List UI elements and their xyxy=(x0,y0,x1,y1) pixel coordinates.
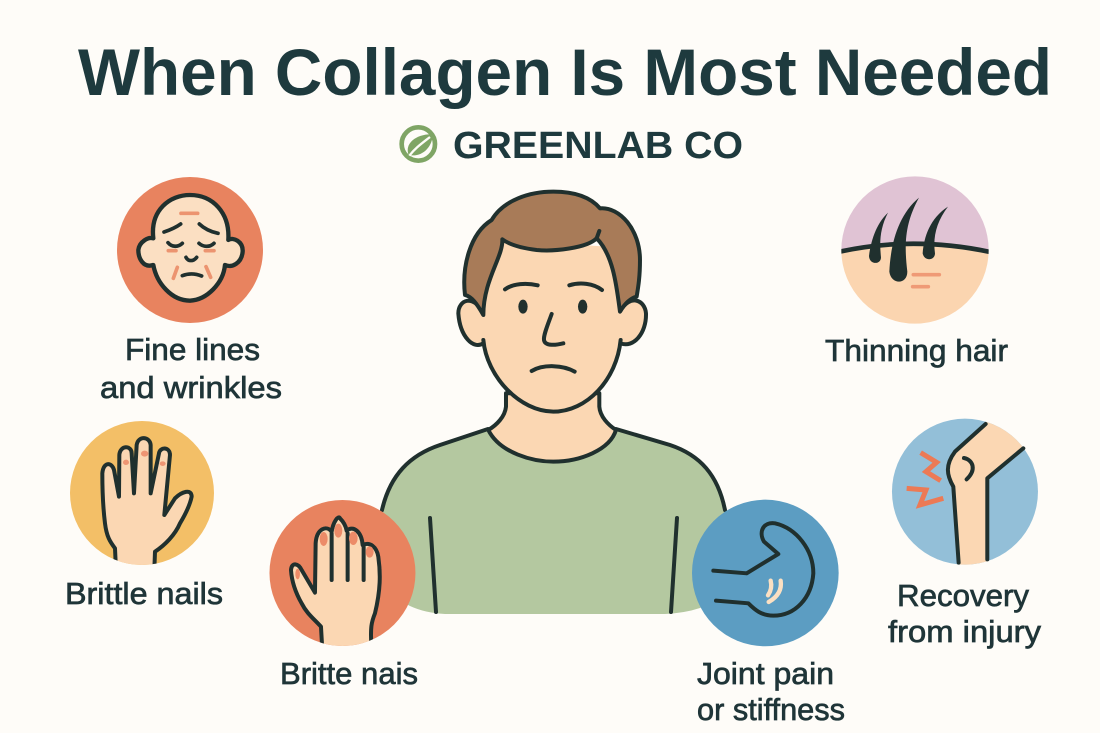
neck xyxy=(488,393,616,462)
icon: hand on red circle xyxy=(269,500,415,650)
label: fine lines: and wrinkles xyxy=(100,370,282,405)
label: recovery: from injury xyxy=(888,614,1042,649)
icon: joint on blue circle xyxy=(692,500,839,646)
label: recovery: Recovery xyxy=(897,578,1029,613)
eyes xyxy=(518,300,528,314)
label: recovery xyxy=(888,578,1042,649)
label: joint pain xyxy=(697,656,845,727)
icon: knee on blue circle xyxy=(892,417,1038,570)
pain zigzags xyxy=(907,453,943,505)
label: fine lines: Fine lines xyxy=(125,332,260,367)
nose xyxy=(544,314,563,345)
label: joint pain: Joint pain xyxy=(697,656,834,691)
title: When Collagen Is Most Needed xyxy=(78,35,1052,109)
head and neck xyxy=(458,192,646,462)
brand name: GREENLAB CO xyxy=(453,125,743,167)
icon: leaf ring xyxy=(402,127,435,161)
icon: hand on yellow circle xyxy=(70,421,214,570)
central figure xyxy=(380,192,730,614)
label: brittle nails misspelt: Britte nais xyxy=(280,656,418,691)
label: fine lines xyxy=(100,332,282,405)
icon: thinning hair xyxy=(837,175,993,330)
label: joint pain: or stiffness xyxy=(697,692,845,727)
label: thinning hair: Thinning hair xyxy=(825,333,1008,368)
icon: face with wrinkles xyxy=(117,177,263,323)
shirt xyxy=(380,429,730,614)
brand logo xyxy=(402,125,743,167)
hair xyxy=(464,192,640,315)
label: brittle nails: Brittle nails xyxy=(65,576,223,611)
brows xyxy=(505,284,602,290)
mouth xyxy=(532,366,575,372)
ears xyxy=(458,301,483,345)
face xyxy=(482,240,622,412)
